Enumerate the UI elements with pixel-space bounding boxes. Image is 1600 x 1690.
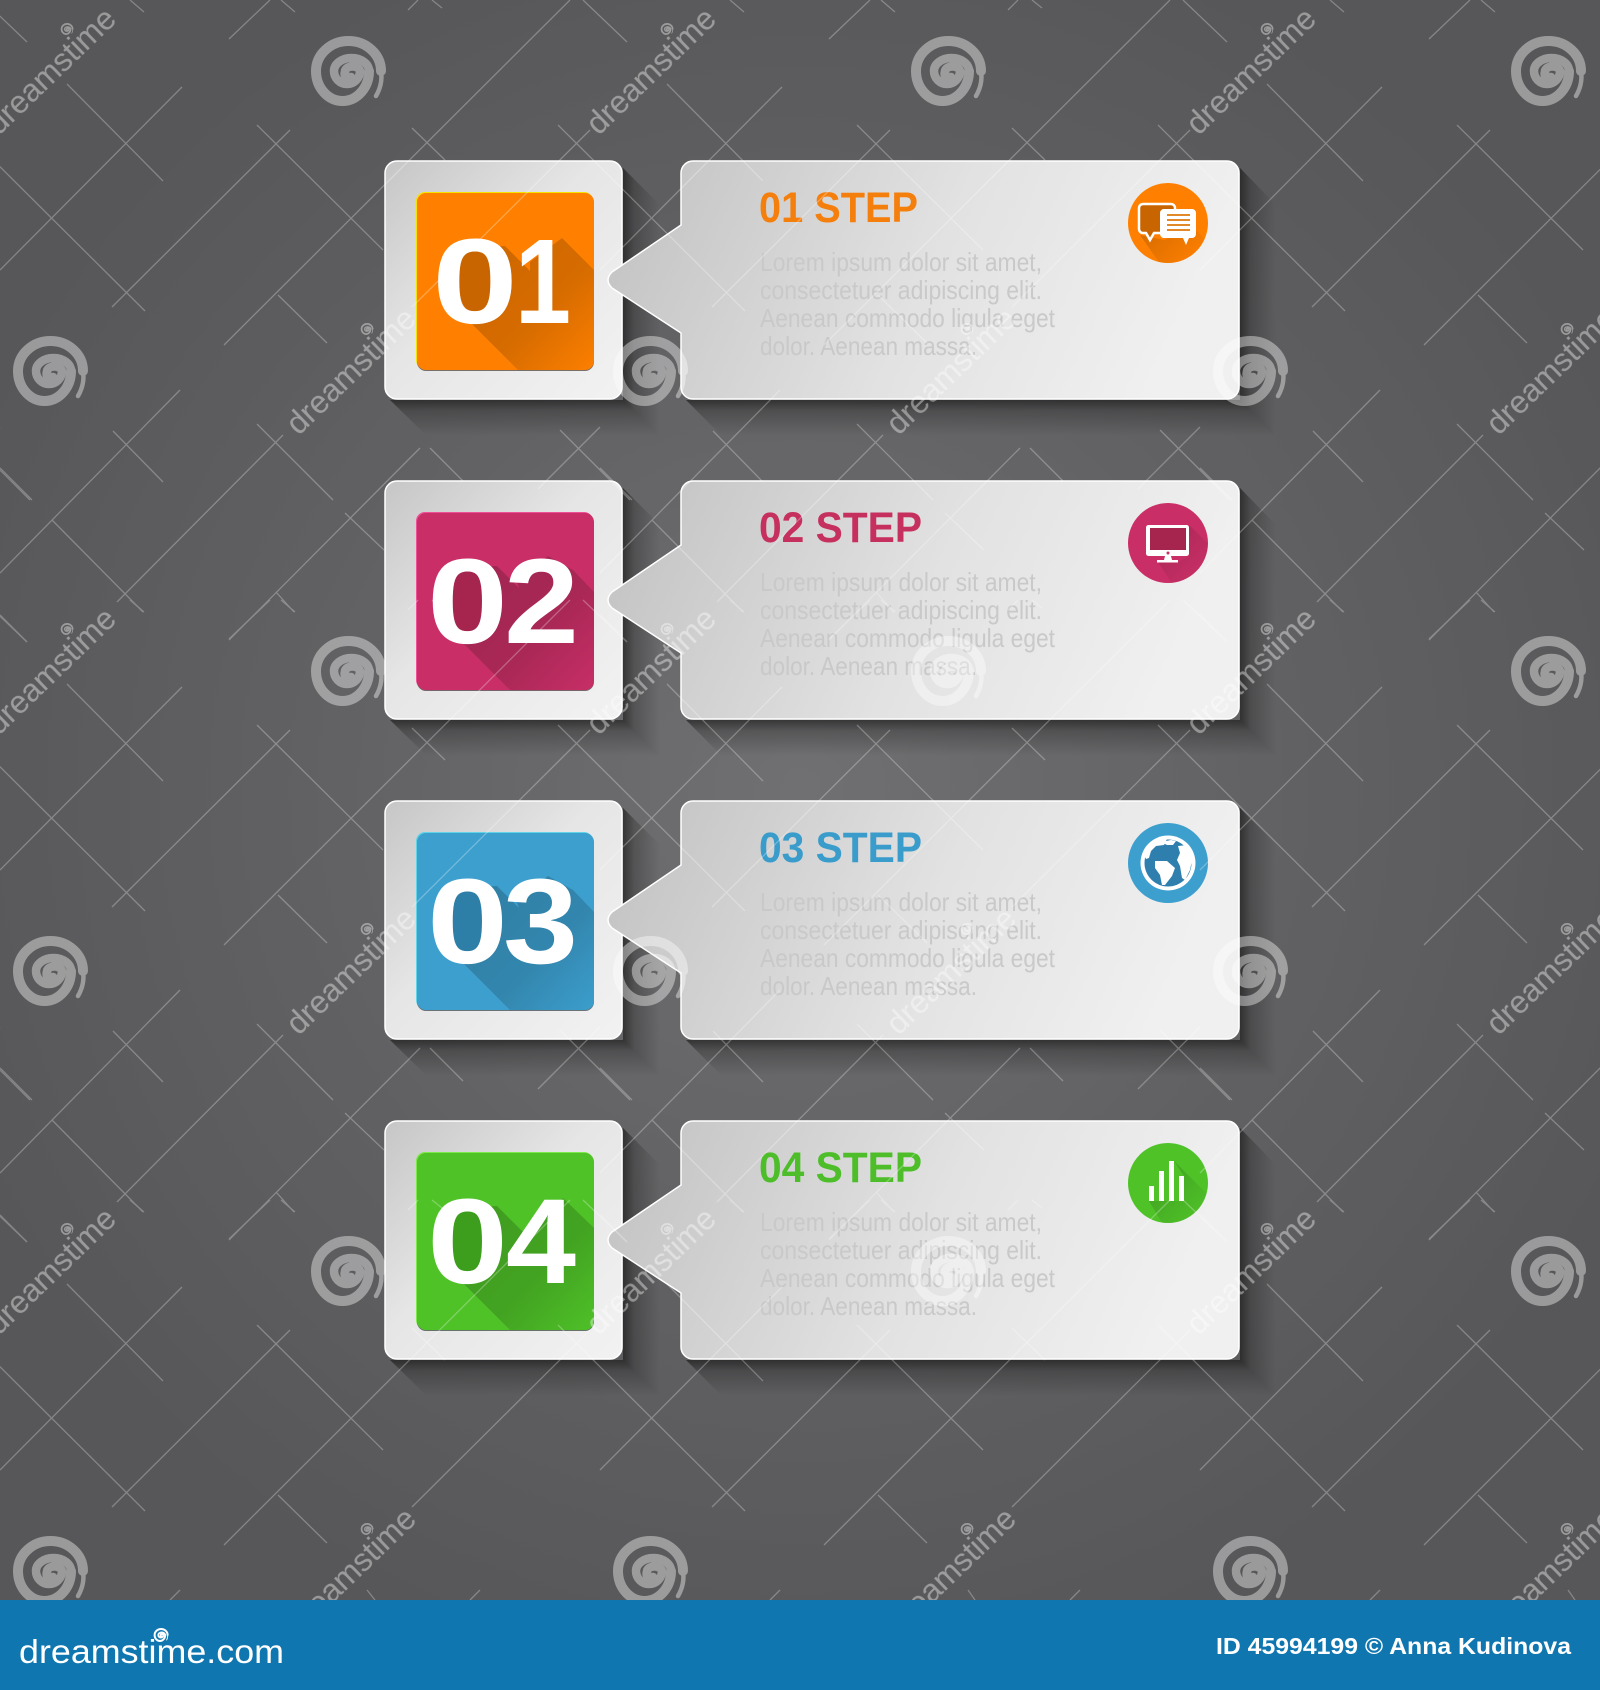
watermark overlay: dreamstime (278, 1500, 423, 1641)
number (432, 213, 571, 349)
body text: Lorem ipsum dolor sit amet, (760, 1207, 1042, 1237)
number (427, 853, 578, 989)
card shadows (390, 488, 1276, 756)
step 02 row (385, 481, 1276, 756)
body text: Aenean commodo ligula eget (760, 623, 1056, 653)
number card (385, 161, 622, 399)
body text: Aenean commodo ligula eget (760, 303, 1056, 333)
number: 0 (432, 213, 518, 349)
body text: dolor. Aenean massa. (760, 1291, 977, 1321)
card shadows (390, 808, 1276, 1076)
watermark overlay: dreamstime (1178, 600, 1323, 741)
number card (385, 1121, 622, 1359)
body text (760, 1207, 1056, 1321)
body text (760, 567, 1056, 681)
icon: globe (1128, 823, 1208, 903)
number: 2 (504, 533, 579, 669)
icon: bar chart (1128, 1143, 1208, 1223)
icon: chat bubbles (1128, 183, 1208, 263)
watermark overlay: dreamstime (1178, 0, 1323, 141)
body text (760, 247, 1056, 361)
body text: consectetuer adipiscing elit. (760, 1235, 1042, 1265)
card shadows (390, 168, 1276, 436)
body text: dolor. Aenean massa. (760, 971, 977, 1001)
logo spiral mark (155, 1629, 168, 1641)
speech panel (608, 1121, 1239, 1359)
heading: 01 STEP (759, 184, 918, 232)
step 03 row (385, 801, 1276, 1076)
body text (760, 887, 1056, 1001)
heading: 04 STEP (759, 1144, 922, 1192)
number square (416, 832, 594, 1011)
watermark overlay: dreamstime (878, 300, 1023, 441)
number: 3 (503, 853, 578, 989)
watermark overlay: dreamstime (578, 600, 723, 741)
heading: 02 STEP (759, 504, 922, 552)
footer bar (0, 1600, 1600, 1690)
number: 0 (427, 533, 508, 669)
number: 0 (427, 853, 508, 989)
step 04 row (385, 1121, 1276, 1396)
step 01 row (385, 161, 1276, 436)
body text: dolor. Aenean massa. (760, 331, 977, 361)
watermark overlay: dreamstime (578, 0, 723, 141)
number square (416, 192, 594, 371)
footer logo: dreamstime.com (19, 1633, 284, 1670)
number: 4 (506, 1173, 576, 1309)
speech panel (608, 481, 1239, 719)
watermark overlay: dreamstime (1178, 1200, 1323, 1341)
speech panel (608, 801, 1239, 1039)
body text: Lorem ipsum dolor sit amet, (760, 887, 1042, 917)
watermark overlay: dreamstime (278, 300, 423, 441)
body text: Aenean commodo ligula eget (760, 1263, 1056, 1293)
number (427, 1173, 576, 1309)
number (427, 533, 579, 669)
watermark overlay: dreamstime (878, 900, 1023, 1041)
watermark overlay: dreamstime (278, 900, 423, 1041)
body text: Aenean commodo ligula eget (760, 943, 1056, 973)
number: 0 (427, 1173, 508, 1309)
footer credit: ID 45994199 © Anna Kudinova (1216, 1633, 1571, 1659)
body text: Lorem ipsum dolor sit amet, (760, 247, 1042, 277)
body text: dolor. Aenean massa. (760, 651, 977, 681)
body text: consectetuer adipiscing elit. (760, 915, 1042, 945)
number card (385, 801, 622, 1039)
body text: consectetuer adipiscing elit. (760, 275, 1042, 305)
speech panel (608, 161, 1239, 399)
watermark overlay: dreamstime (578, 1200, 723, 1341)
watermark overlay: dreamstime (878, 1500, 1023, 1641)
card shadows (390, 1128, 1276, 1396)
icon: monitor (1128, 503, 1208, 583)
body text: Lorem ipsum dolor sit amet, (760, 567, 1042, 597)
number square (416, 1152, 594, 1331)
heading: 03 STEP (759, 824, 922, 872)
number card (385, 481, 622, 719)
body text: consectetuer adipiscing elit. (760, 595, 1042, 625)
number: 1 (515, 213, 571, 349)
number square (416, 512, 594, 691)
